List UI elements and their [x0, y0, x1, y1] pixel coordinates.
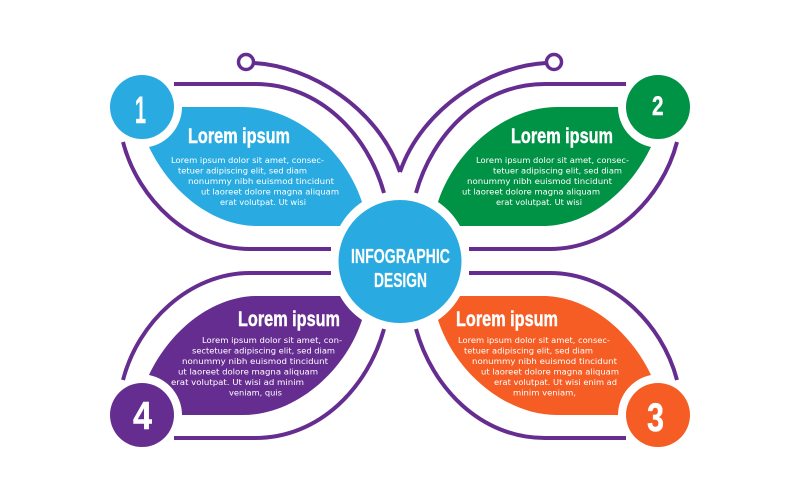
number badge 4: [110, 383, 174, 447]
center circle: infographic design: [338, 200, 462, 323]
body text: panel 1: [171, 155, 339, 207]
body text: panel 1: nonummy nibh euismod tincidunt: [188, 176, 335, 186]
connector: top left line with ring: [238, 54, 400, 172]
number badge 3: [626, 383, 690, 447]
body text: panel 1: ut laoreet dolore magna aliquam: [201, 186, 339, 196]
body text: panel 4: ut laoreet dolore magna aliquam: [178, 366, 318, 376]
body text: panel 4: veniam, quis: [229, 388, 282, 398]
leaf: panel 4: [149, 296, 362, 415]
body text: panel 3: tetuer adipiscing elit, sed diam: [464, 346, 593, 356]
center circle: infographic design: INFOGRAPHIC: [351, 246, 450, 268]
number badge 2: 2: [652, 91, 664, 121]
number badge 1: 1: [135, 90, 146, 132]
number badge 1: [110, 75, 174, 139]
body text: panel 3: erat volutpat. Ut wisi enim ad: [494, 377, 617, 387]
number badge 3: 3: [647, 396, 664, 440]
body text: panel 4: sectetuer adipiscing elit, sed diam: [192, 346, 335, 356]
body text: panel 3: Lorem ipsum dolor sit amet, consec-: [458, 335, 610, 345]
body text: panel 4: [171, 335, 342, 398]
heading: panel 2: Lorem ipsum: [511, 125, 613, 148]
body text: panel 4: nonummy nibh euismod tincidunt: [182, 356, 329, 366]
body text: panel 1: Lorem ipsum dolor sit amet, consec-: [171, 155, 324, 165]
body text: panel 1: erat volutpat. Ut wisi: [220, 197, 306, 207]
body text: panel 2: erat volutpat. Ut wisi: [496, 197, 582, 207]
body text: panel 3: [458, 335, 619, 398]
body text: panel 3: minim veniam,: [513, 388, 576, 398]
outline: panel 1: [123, 84, 384, 249]
body text: panel 1: tetuer adipiscing elit, sed diam: [178, 166, 307, 176]
body text: panel 2: [462, 155, 629, 207]
heading: panel 4: Lorem ipsum: [238, 308, 340, 331]
body text: panel 2: Lorem ipsum dolor sit amet, consec-: [476, 155, 629, 165]
body text: panel 3: nonummy nibh euismod tincidunt: [472, 356, 618, 366]
number badge 4: 4: [133, 395, 152, 438]
panel 2: green: [416, 75, 690, 249]
panel 3: orange: [416, 273, 690, 447]
panel 1: blue: [110, 75, 384, 249]
outline: panel 2: [416, 84, 677, 249]
body text: panel 4: erat volutpat. Ut wisi ad minim: [171, 377, 304, 387]
outline: panel 3: [416, 273, 677, 438]
body text: panel 2: tetuer adipiscing elit, sed diam: [493, 166, 622, 176]
connector: top right line with ring: [400, 54, 562, 172]
panel 4: purple: [110, 273, 384, 447]
leaf: panel 2: [438, 107, 651, 226]
body text: panel 4: Lorem ipsum dolor sit amet, con-: [202, 335, 342, 345]
number badge 2: [626, 75, 690, 139]
body text: panel 2: ut laoreet dolore magna aliquam: [462, 186, 600, 196]
leaf: panel 3: [438, 296, 651, 415]
leaf: panel 1: [149, 107, 362, 226]
center circle: infographic design: DESIGN: [374, 270, 427, 292]
heading: panel 1: Lorem ipsum: [188, 125, 290, 148]
outline: panel 4: [123, 273, 384, 438]
body text: panel 2: nonummy nibh euismod tincidunt: [467, 176, 613, 186]
heading: panel 3: Lorem ipsum: [456, 308, 558, 331]
body text: panel 3: ut laoreet dolore magna aliquam: [481, 366, 619, 376]
